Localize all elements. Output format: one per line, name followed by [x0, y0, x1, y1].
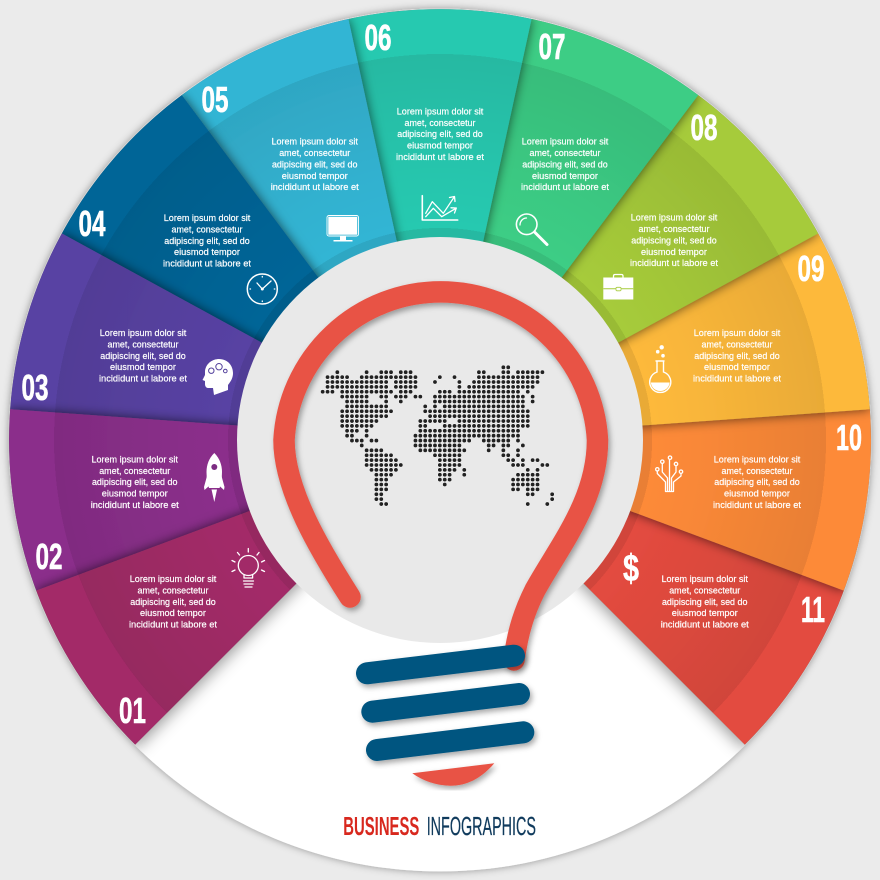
number 10: 10 [836, 417, 862, 458]
text block 10: amet, consectetur [722, 466, 792, 476]
number 03: 03 [22, 367, 48, 408]
text block 01: incididunt ut labore et [129, 620, 217, 630]
title: INFOGRAPHICS [427, 813, 536, 841]
icon: briefcase [603, 274, 633, 300]
number 08: 08 [690, 107, 718, 148]
text block 04 [163, 213, 251, 269]
text block 06 [396, 106, 484, 162]
icon: circuit tree [656, 456, 683, 492]
number 04: 04 [78, 203, 106, 244]
panel: sector 06 teal [348, 9, 538, 243]
text block 10: incididunt ut labore et [713, 500, 801, 510]
text block 11: eiusmod tempor [672, 608, 738, 618]
bulb bottom cap [412, 763, 494, 786]
text block 02: eiusmod tempor [102, 489, 168, 499]
text block 01: eiusmod tempor [140, 608, 206, 618]
panel: sector 10 orange [628, 409, 871, 596]
icon: light bulb [232, 548, 264, 587]
text block 07: adipiscing elit, sed do [522, 159, 608, 169]
text block 07 [521, 137, 609, 192]
icon: magnifier [516, 214, 547, 244]
text block 03: Lorem ipsum dolor sit [100, 328, 187, 338]
text block 09: eiusmod tempor [704, 362, 770, 372]
icon: rocket [204, 453, 224, 502]
text block 01: amet, consectetur [138, 585, 208, 595]
text block 07: amet, consectetur [530, 148, 600, 158]
text block 02: adipiscing elit, sed do [92, 477, 177, 487]
text block 07: Lorem ipsum dolor sit [522, 137, 609, 147]
icon: flask [650, 345, 671, 392]
title: BUSINESS [343, 813, 419, 841]
bulb screw base bars [367, 656, 523, 750]
text block 08: eiusmod tempor [641, 247, 707, 257]
text block 01: adipiscing elit, sed do [130, 597, 216, 607]
number 06: 06 [364, 17, 392, 58]
text block 05: incididunt ut labore et [271, 182, 359, 192]
text block 11 [661, 574, 749, 630]
text block 01: Lorem ipsum dolor sit [130, 574, 217, 584]
text block 11: incididunt ut labore et [661, 620, 749, 630]
number 01: 01 [119, 690, 146, 731]
text block 09: incididunt ut labore et [693, 374, 781, 384]
text block 05: adipiscing elit, sed do [272, 159, 357, 169]
text block 06: eiusmod tempor [407, 141, 473, 151]
text block 11: Lorem ipsum dolor sit [661, 574, 748, 584]
text block 02: Lorem ipsum dolor sit [91, 454, 178, 464]
panel: sector 01 magenta [35, 504, 296, 745]
text block 05 [271, 137, 359, 192]
text block 04: eiusmod tempor [174, 247, 240, 257]
text block 04: incididunt ut labore et [163, 259, 251, 269]
icon: line chart [422, 196, 458, 220]
panel: sector 04 dark blue [62, 92, 324, 342]
number 09: 09 [798, 248, 824, 289]
text block 06: amet, consectetur [404, 118, 476, 128]
panel: sector 09 yellow [618, 234, 870, 434]
text block 04: adipiscing elit, sed do [164, 236, 250, 246]
title [343, 813, 536, 841]
centre grey circle [237, 237, 643, 643]
text block 11: adipiscing elit, sed do [662, 597, 747, 607]
number 05: 05 [202, 79, 228, 120]
icon: dollar sign: $ [623, 548, 639, 590]
text block 10: Lorem ipsum dolor sit [714, 454, 801, 464]
text block 05: Lorem ipsum dolor sit [271, 137, 358, 147]
text block 03: incididunt ut labore et [99, 374, 187, 384]
text block 10 [713, 454, 801, 510]
light bulb outline [284, 292, 598, 660]
text block 06: incididunt ut labore et [396, 152, 484, 162]
text block 11: amet, consectetur [669, 585, 740, 595]
text block 06: Lorem ipsum dolor sit [397, 106, 484, 116]
text block 09 [693, 328, 781, 384]
icon: head with gears [202, 359, 233, 395]
world map dots [323, 367, 552, 504]
text block 10: adipiscing elit, sed do [714, 477, 800, 487]
text block 02: incididunt ut labore et [91, 500, 179, 510]
text block 10: eiusmod tempor [724, 489, 790, 499]
panel: sector 11 red [584, 511, 844, 745]
text block 08: amet, consectetur [638, 224, 710, 234]
text block 03: eiusmod tempor [110, 362, 176, 372]
number 02: 02 [36, 536, 62, 577]
number 11: 11 [801, 589, 825, 630]
panel: sector 05 sky blue [182, 18, 404, 278]
text block 05: eiusmod tempor [282, 171, 348, 181]
panel: sector 03 indigo [10, 229, 265, 426]
text block 07: incididunt ut labore et [521, 182, 609, 192]
panel: sector 08 lime [562, 95, 821, 350]
text block 03: adipiscing elit, sed do [100, 351, 186, 361]
panel: sector 02 purple [9, 402, 250, 591]
text block 08: adipiscing elit, sed do [631, 235, 717, 245]
text block 08 [630, 213, 718, 268]
text block 08: Lorem ipsum dolor sit [631, 213, 718, 223]
text block 08: incididunt ut labore et [630, 258, 718, 268]
text block 03 [99, 328, 187, 384]
text block 09: Lorem ipsum dolor sit [694, 328, 781, 338]
text block 06: adipiscing elit, sed do [397, 129, 483, 139]
text block 03: amet, consectetur [108, 339, 178, 349]
icon: monitor [327, 216, 358, 242]
text block 01 [129, 574, 217, 630]
text block 04: Lorem ipsum dolor sit [164, 213, 251, 223]
text block 02 [91, 454, 179, 510]
number 07: 07 [538, 26, 566, 67]
text block 04: amet, consectetur [172, 224, 242, 234]
text block 07: eiusmod tempor [532, 171, 598, 181]
panel: sector 07 green [483, 19, 703, 282]
icon: clock [247, 274, 277, 304]
text block 09: adipiscing elit, sed do [694, 351, 780, 361]
text block 09: amet, consectetur [702, 339, 772, 349]
text block 05: amet, consectetur [279, 148, 350, 158]
text block 02: amet, consectetur [99, 466, 170, 476]
